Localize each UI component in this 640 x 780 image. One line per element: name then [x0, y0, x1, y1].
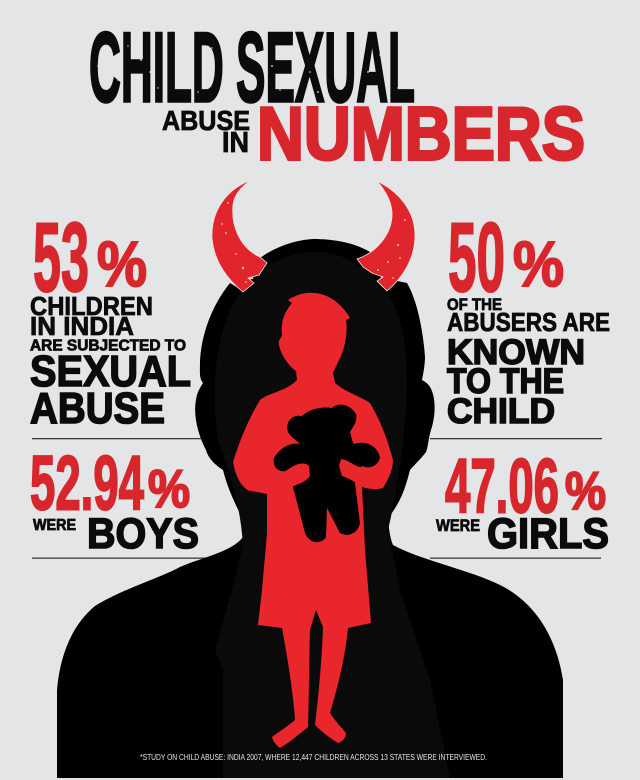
- abuser silhouette: [57, 239, 563, 778]
- footnote: *STUDY ON CHILD ABUSE: INDIA 2007, WHERE 12,447 CHILDREN ACROSS 13 STATES WERE INTERVIEWED.: [140, 753, 487, 762]
- text: were: WERE: [436, 516, 480, 535]
- stat: 53 percent of children: [30, 202, 191, 433]
- child silhouette: [233, 293, 393, 748]
- text: children in india: [30, 291, 186, 354]
- text: children in india: IN INDIA: [30, 311, 134, 341]
- heading: abuse: ABUSE: [162, 105, 250, 136]
- stat: 50 percent known abusers: [447, 202, 610, 431]
- number: 53%: %: [97, 228, 147, 300]
- text: sexual abuse: SEXUAL: [30, 347, 191, 396]
- text: known to the child: CHILD: [447, 392, 555, 431]
- text: known to the child: [447, 333, 585, 431]
- text: known to the child: TO THE: [447, 362, 564, 401]
- text: girls: GIRLS: [487, 510, 609, 558]
- text: boys: BOYS: [87, 510, 199, 558]
- text: children in india: CHILDREN: [30, 291, 153, 321]
- abuser inner body shading: [215, 252, 450, 778]
- abuser outer body: [57, 239, 563, 778]
- left horn: [212, 180, 267, 292]
- text: of the abusers are: OF THE: [447, 295, 502, 314]
- text: of the abusers are: [447, 295, 610, 337]
- number: 52.94%: 52.94: [30, 440, 144, 526]
- text: children in india: ARE SUBJECTED TO: [30, 338, 186, 354]
- child hands: [247, 459, 390, 494]
- child body: [233, 293, 393, 748]
- heading: in: IN: [222, 127, 249, 159]
- text: were: WERE: [33, 517, 76, 534]
- stat: 47.06 percent girls: [436, 444, 609, 558]
- right horn: [357, 181, 415, 291]
- text: sexual abuse: ABUSE: [30, 384, 165, 433]
- text: of the abusers are: ABUSERS ARE: [447, 307, 610, 337]
- text: sexual abuse: [30, 347, 191, 433]
- stat: 52.94 percent boys: [30, 440, 199, 558]
- number: 47.06%: 47.06: [445, 444, 559, 530]
- title: [89, 12, 585, 176]
- title grunge specks: [97, 45, 399, 93]
- number: 52.94%: %: [148, 460, 190, 519]
- teddy bear: [274, 405, 380, 542]
- heading: numbers: NUMBERS: [257, 92, 585, 176]
- number: 50%: %: [513, 228, 564, 300]
- number: 47.06%: %: [565, 462, 606, 521]
- text: known to the child: KNOWN: [447, 333, 585, 372]
- number: 50%: 50: [448, 202, 505, 312]
- number: 53%: 53: [33, 202, 89, 312]
